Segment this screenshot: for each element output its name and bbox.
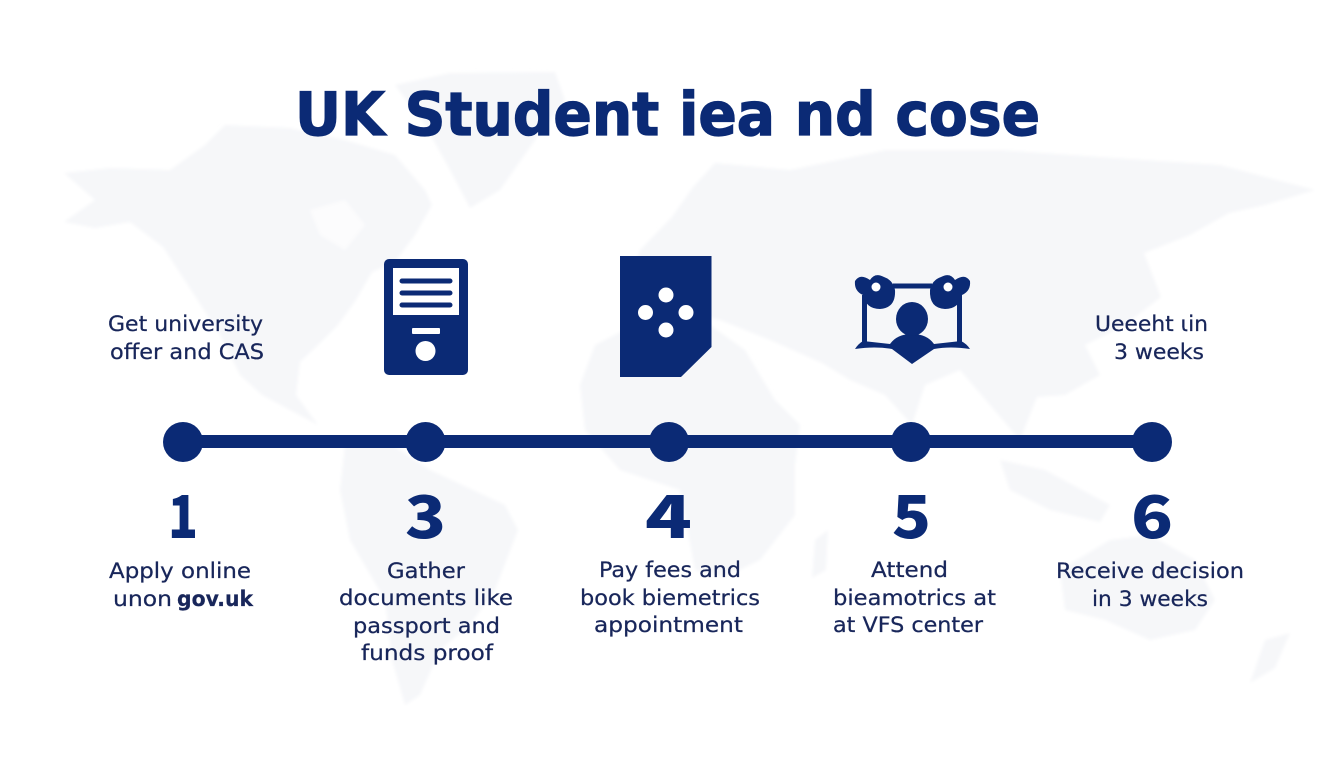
map: Africa xyxy=(580,322,800,577)
step 3 xyxy=(339,470,513,666)
map: Greenland xyxy=(395,72,565,208)
step 4: Pay fees and xyxy=(599,558,741,583)
text: top right label xyxy=(1095,312,1208,365)
step 6: 6 xyxy=(1131,470,1173,555)
icon: person on open book xyxy=(855,275,970,364)
step 5: 5 xyxy=(892,470,931,555)
timeline xyxy=(163,422,1172,462)
map: Southeast Asia islands xyxy=(1000,460,1110,522)
step 1: Apply online xyxy=(109,559,251,584)
step 1 xyxy=(109,470,254,612)
step 5: bieamotrics at xyxy=(833,586,996,611)
step 1: gov.uk xyxy=(177,587,254,612)
map: Europe and Asia xyxy=(625,150,1315,440)
step 3: documents like xyxy=(339,586,513,611)
map: New Zealand xyxy=(1250,633,1290,683)
text: step 2 top label xyxy=(108,312,264,365)
text: step 2 top label: Get university xyxy=(108,312,263,337)
map: Madagascar xyxy=(812,530,828,578)
step 5: Attend xyxy=(871,558,948,583)
text: top right label: 3 weeks xyxy=(1114,340,1204,365)
step 6: in 3 weeks xyxy=(1092,587,1208,612)
step 1: 1 xyxy=(168,470,198,555)
title: UK Student iea nd cose xyxy=(295,80,1040,150)
step 6 xyxy=(1056,470,1244,612)
icon: document tower xyxy=(384,259,468,375)
map: North America xyxy=(64,125,432,425)
step 4: book biemetrics xyxy=(580,586,760,611)
map: South America xyxy=(340,440,518,705)
map: Australia xyxy=(1060,535,1215,640)
step 3: funds proof xyxy=(361,641,493,666)
step 3: Gather xyxy=(387,559,465,584)
world map background xyxy=(64,72,1315,705)
step 1: unon xyxy=(113,587,172,612)
step 5 xyxy=(833,470,996,638)
step 5: at VFS center xyxy=(833,613,983,638)
text: step 2 top label: offer and CAS xyxy=(110,340,264,365)
step 3: passport and xyxy=(353,614,500,639)
text: top right label: Ueeeht ιin xyxy=(1095,312,1208,337)
step 3: 3 xyxy=(405,470,446,555)
map: Hudson Bay cut-out xyxy=(310,200,365,250)
step 4: appointment xyxy=(594,613,743,638)
step 4 xyxy=(580,470,760,638)
step 6: Receive decision xyxy=(1056,559,1244,584)
step 4: 4 xyxy=(645,470,692,555)
icon: folded file with dots xyxy=(620,256,712,377)
